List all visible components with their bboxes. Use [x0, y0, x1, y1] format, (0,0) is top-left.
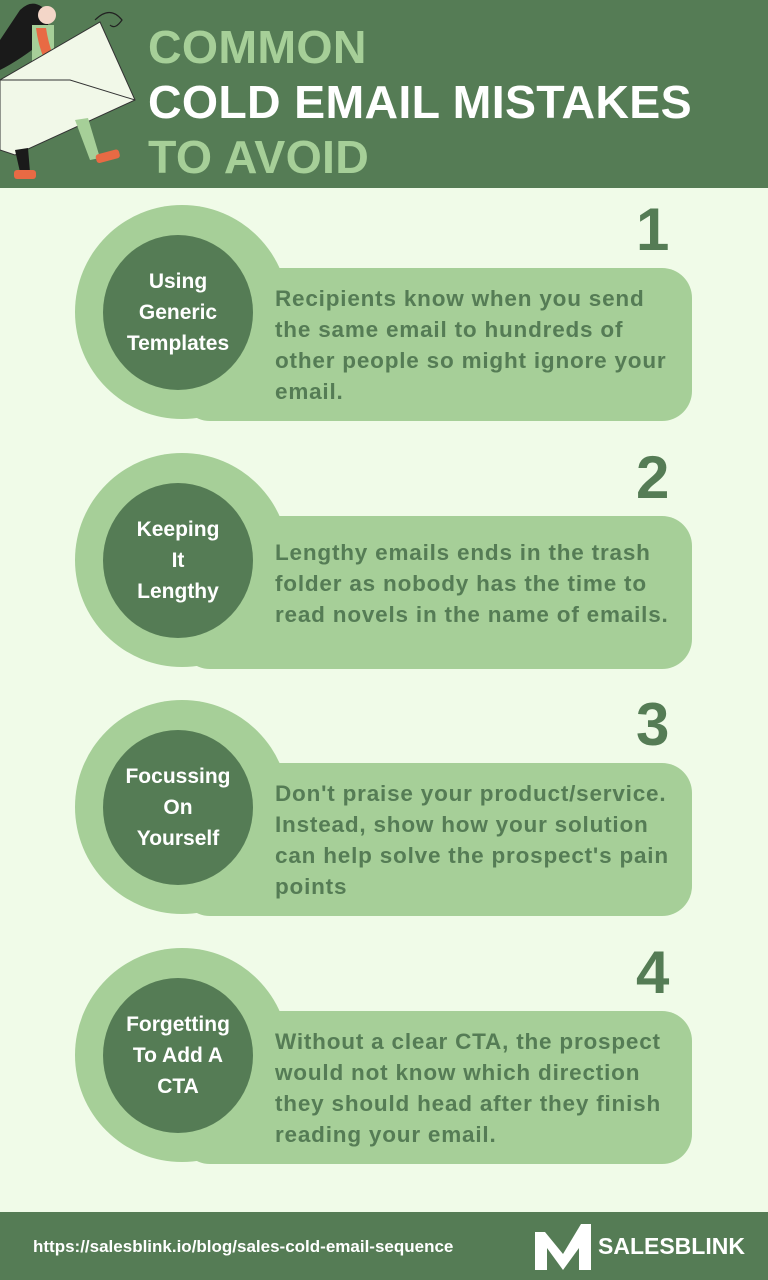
panel: mistake 4 — [75, 939, 692, 1164]
panel: mistake 2 — [75, 444, 692, 669]
title: COLD EMAIL MISTAKES — [148, 76, 692, 128]
text: mistake 4: would not know which direction — [275, 1060, 640, 1085]
heading: focussing on yourself: Yourself — [137, 827, 219, 850]
text: mistake 4: reading your email. — [275, 1122, 497, 1147]
number 3: 3 — [636, 691, 669, 758]
text: mistake 3: points — [275, 874, 347, 899]
heading: keeping it lengthy: Keeping — [137, 518, 219, 541]
text: mistake 1: email. — [275, 379, 344, 404]
heading: forgetting to add a CTA: CTA — [157, 1075, 199, 1098]
url text: https://salesblink.io/blog/sales-cold-email-sequence — [33, 1237, 453, 1256]
heading: focussing on yourself — [103, 730, 253, 885]
heading: keeping it lengthy: It — [172, 549, 184, 572]
heading: keeping it lengthy: Lengthy — [137, 580, 219, 603]
heading: using generic templates: Using — [149, 270, 207, 293]
heading: focussing on yourself: Focussing — [125, 765, 230, 788]
number 4: 4 — [636, 939, 669, 1006]
icon: salesblink logo — [535, 1224, 591, 1270]
heading: forgetting to add a CTA: To Add A — [133, 1044, 223, 1067]
panel: mistake 1 — [75, 196, 692, 421]
title — [148, 21, 692, 183]
text: mistake 2: folder as nobody has the time to — [275, 571, 647, 596]
heading: using generic templates: Templates — [127, 332, 229, 355]
text: mistake 2: read novels in the name of emails. — [275, 602, 669, 627]
heading: using generic templates — [103, 235, 253, 390]
text: mistake 4 — [275, 1029, 661, 1147]
heading: focussing on yourself: On — [163, 796, 193, 819]
footer — [0, 1212, 768, 1280]
brand name: SALESBLINK — [598, 1233, 745, 1259]
text: mistake 3: can help solve the prospect's pain — [275, 843, 669, 868]
text: mistake 2: Lengthy emails ends in the trash — [275, 540, 651, 565]
heading: keeping it lengthy — [103, 483, 253, 638]
text: mistake 4: they should head after they finish — [275, 1091, 661, 1116]
text: mistake 3: Don't praise your product/service. — [275, 781, 666, 806]
header — [0, 0, 768, 188]
text: mistake 1: other people so might ignore your — [275, 348, 666, 373]
panel: mistake 3 — [75, 691, 692, 916]
heading: forgetting to add a CTA: Forgetting — [126, 1013, 230, 1036]
text: mistake 2 — [275, 540, 669, 627]
heading: forgetting to add a CTA — [103, 978, 253, 1133]
text: mistake 1: the same email to hundreds of — [275, 317, 623, 342]
text: mistake 3: Instead, show how your solution — [275, 812, 649, 837]
number 1: 1 — [636, 196, 669, 263]
heading: using generic templates: Generic — [139, 301, 217, 324]
illustration: woman with envelope — [0, 4, 136, 179]
title: TO AVOID — [148, 131, 369, 183]
text: mistake 1 — [275, 286, 666, 404]
title: COMMON — [148, 21, 367, 73]
text: mistake 1: Recipients know when you send — [275, 286, 645, 311]
text: mistake 4: Without a clear CTA, the prospect — [275, 1029, 661, 1054]
number 2: 2 — [636, 444, 669, 511]
text: mistake 3 — [275, 781, 669, 899]
